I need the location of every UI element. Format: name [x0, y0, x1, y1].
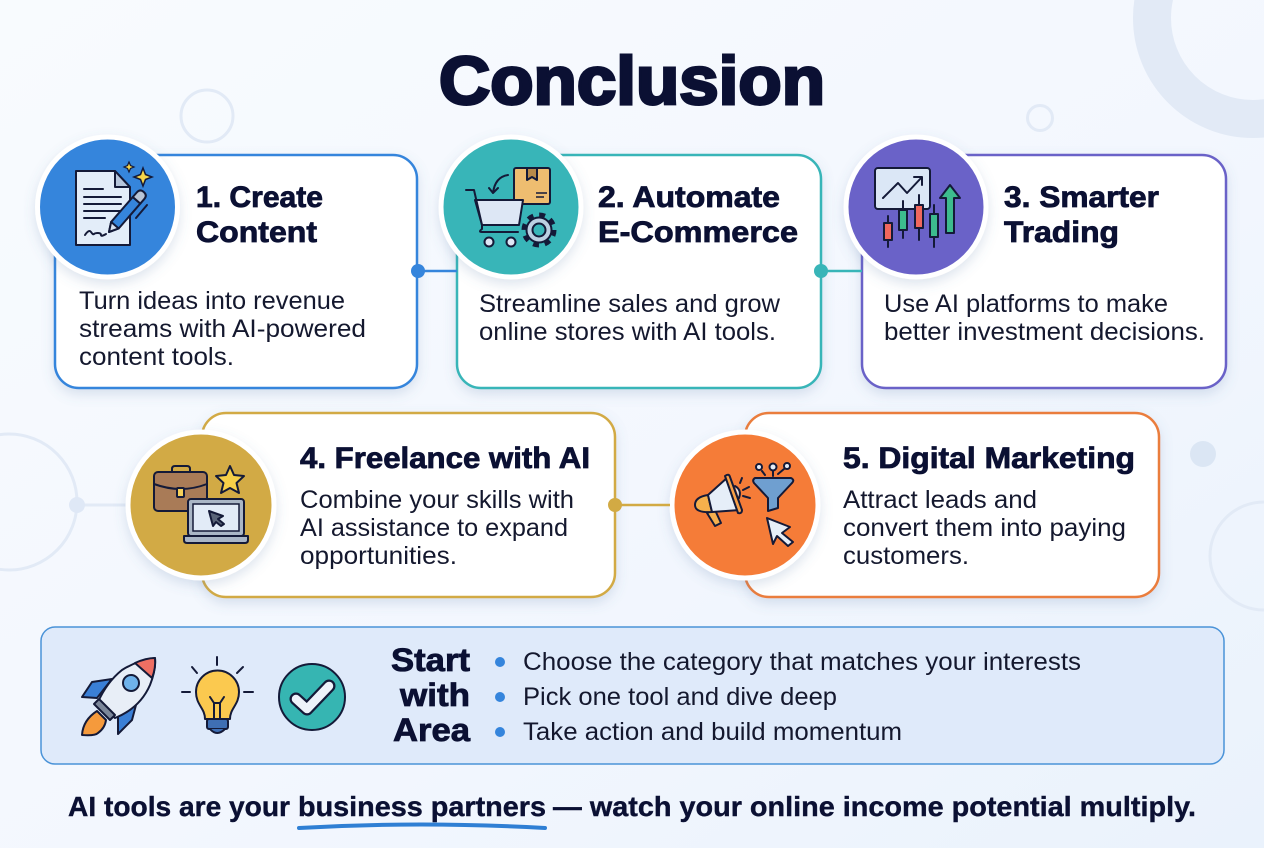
body text: Use AI platforms to make: [884, 290, 1168, 318]
heading: Area: [393, 712, 470, 748]
underline swoosh: [299, 824, 545, 828]
body text: streams with AI-powered: [79, 315, 366, 343]
panel: 2. Automate E-Commerce: [441, 137, 821, 388]
body text: better investment decisions.: [884, 318, 1205, 346]
checklist: [495, 648, 1081, 746]
icon: megaphone, funnel and cursor: [672, 432, 818, 578]
panel: start with area: [41, 627, 1224, 764]
body text: [300, 486, 574, 570]
body text: convert them into paying: [843, 514, 1126, 542]
icon: cart, box and gear: [441, 137, 581, 277]
body text: Combine your skills with: [300, 486, 574, 514]
body text: [843, 486, 1126, 570]
checklist: Pick one tool and dive deep: [523, 683, 837, 711]
closing statement: business partners: [298, 791, 546, 822]
heading: E-Commerce: [598, 216, 798, 249]
body text: Turn ideas into revenue: [79, 287, 345, 315]
checklist: Take action and build momentum: [523, 718, 902, 746]
panel: 3. Smarter Trading: [846, 137, 1226, 388]
heading: with: [399, 677, 470, 713]
panel: 5. Digital Marketing: [672, 413, 1159, 597]
panel: 1. Create Content: [38, 137, 417, 388]
heading: [391, 642, 470, 748]
title: Conclusion: [439, 43, 825, 119]
body text: [884, 290, 1205, 346]
connector: card 2 to card 3: [814, 264, 862, 278]
heading: 2. Automate: [598, 181, 780, 214]
closing statement: [68, 791, 1196, 828]
heading: [598, 181, 798, 249]
icon: briefcase, star and laptop: [128, 432, 274, 578]
checklist: Choose the category that matches your interests: [523, 648, 1081, 676]
closing statement: — watch your online income potential multiply.: [553, 791, 1196, 822]
connector: card 4 to card 5: [608, 498, 670, 512]
decorative background circles: [0, 0, 1264, 610]
heading: Trading: [1004, 216, 1119, 249]
heading: 4. Freelance with AI: [300, 442, 590, 475]
heading: Content: [196, 216, 317, 249]
icon: light bulb: [182, 657, 253, 733]
body text: [79, 287, 366, 371]
panel: 4. Freelance with AI: [128, 413, 615, 597]
connector: card 1 to card 2: [411, 264, 457, 278]
body text: Streamline sales and grow: [479, 290, 781, 318]
closing statement: AI tools are your: [68, 791, 290, 822]
icon: check mark: [279, 664, 345, 730]
heading: 5. Digital Marketing: [843, 442, 1135, 475]
heading: Start: [391, 642, 470, 678]
heading: [1004, 181, 1159, 249]
body text: [479, 290, 781, 346]
body text: opportunities.: [300, 542, 457, 570]
heading: 1. Create: [196, 181, 323, 214]
heading: 3. Smarter: [1004, 181, 1159, 214]
body text: customers.: [843, 542, 969, 570]
body text: content tools.: [79, 343, 234, 371]
heading: [196, 181, 323, 249]
icon: document and pen: [38, 137, 178, 277]
body text: Attract leads and: [843, 486, 1037, 514]
icon: trading chart: [846, 137, 986, 277]
body text: online stores with AI tools.: [479, 318, 776, 346]
body text: AI assistance to expand: [300, 514, 568, 542]
icon: rocket: [82, 658, 155, 735]
